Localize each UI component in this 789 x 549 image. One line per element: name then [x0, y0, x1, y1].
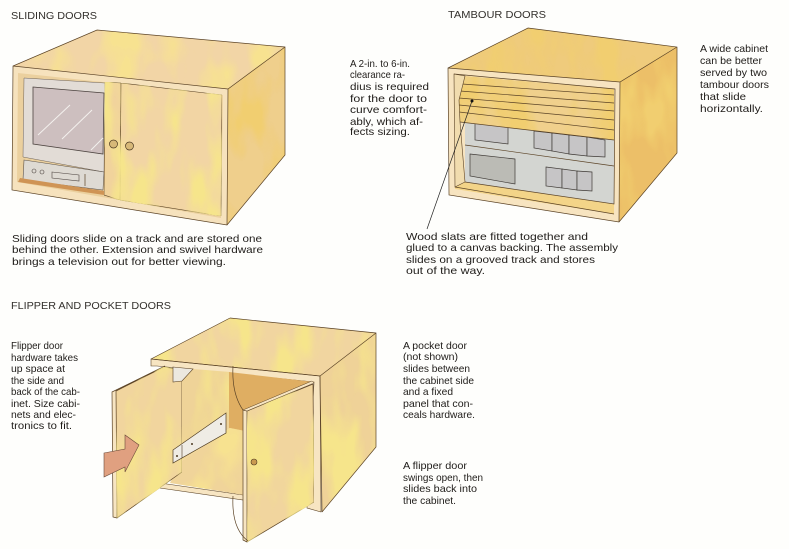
text: flipper hardware note: the side and — [11, 376, 64, 387]
text: pocket door note: A pocket door — [403, 341, 468, 352]
text: pocket door note: the cabinet side — [403, 376, 474, 387]
text: sliding doors caption: brings a television out for better viewing. — [12, 257, 226, 268]
track strip — [18, 178, 104, 195]
text: flipper hardware note: hardware takes — [11, 353, 78, 364]
text: flipper hardware note: Flipper door — [11, 341, 64, 352]
cabinet top face — [448, 28, 677, 82]
text: clearance radius note — [350, 59, 429, 138]
text: clearance radius note: dius is required — [350, 82, 429, 93]
text: flipper door note — [403, 461, 483, 507]
text: flipper door note: A flipper door — [403, 461, 468, 472]
interior left wall — [180, 368, 230, 462]
text: wood slats caption: slides on a grooved track and stores — [406, 255, 595, 266]
tambour slats — [459, 76, 614, 140]
cabinet bottom frame — [160, 483, 250, 501]
text: clearance radius note: curve comfort- — [350, 105, 427, 116]
text: clearance radius note: fects sizing. — [350, 127, 410, 138]
opening with television — [17, 73, 223, 218]
text: flipper door note: slides back into — [403, 484, 477, 495]
text: sliding doors caption: Sliding doors slide on a track and are stored one — [12, 234, 262, 245]
interior back panel — [229, 372, 314, 432]
door knobs — [110, 140, 134, 150]
inner bottom — [455, 181, 614, 214]
screen glare — [38, 105, 103, 150]
cabinet top face — [151, 318, 376, 376]
text: flipper hardware note: inet. Size cabi- — [11, 399, 80, 410]
right door — [243, 381, 314, 542]
arrow — [104, 435, 139, 477]
hinge plate — [173, 367, 193, 382]
illustration: tambour door cabinet — [427, 28, 677, 229]
text: pocket door note — [403, 341, 475, 421]
text: flipper hardware note: tronics to fit. — [11, 421, 72, 432]
text: pocket door note: ceals hardware. — [403, 410, 475, 421]
text: wide cabinet note — [700, 44, 769, 115]
cabinet front frame — [151, 359, 321, 512]
television screen — [33, 87, 104, 154]
text: wood slats caption: glued to a canvas backing. The assembly — [406, 243, 619, 254]
text: flipper door note: swings open, then — [403, 473, 483, 484]
cabinet top face — [13, 30, 285, 89]
illustration: flipper door cabinet — [104, 318, 376, 542]
right sliding door — [120, 83, 222, 216]
text: wood slats caption — [406, 232, 619, 277]
text: pocket door note: and a fixed — [403, 387, 453, 398]
illustration: sliding door cabinet — [12, 30, 285, 225]
text: flipper door note: the cabinet. — [403, 496, 456, 507]
text: wide cabinet note: that slide — [700, 92, 746, 103]
door swing arcs — [233, 366, 248, 541]
heading: sliding doors: SLIDING DOORS — [11, 10, 97, 22]
text: wood slats caption: out of the way. — [406, 266, 485, 277]
cabinet right side — [320, 333, 376, 512]
text: flipper hardware note: back of the cab- — [11, 387, 80, 398]
text: sliding doors caption: behind the other. Extension and swivel hardware — [12, 245, 263, 256]
text: wide cabinet note: can be better — [700, 56, 763, 67]
heading: tambour doors: TAMBOUR DOORS — [448, 9, 546, 21]
text: sliding doors caption — [12, 234, 263, 268]
flipper slide rail — [173, 413, 226, 463]
text: clearance radius note: ably, which af- — [350, 117, 423, 128]
text: wood slats caption: Wood slats are fitted together and — [406, 232, 588, 243]
interior floor — [170, 428, 250, 496]
text: pocket door note: slides between — [403, 364, 470, 375]
heading: flipper and pocket doors: FLIPPER AND POCKET DOORS — [11, 300, 171, 312]
text: flipper hardware note: up space at — [11, 364, 65, 375]
text: pocket door note: (not shown) — [403, 352, 458, 363]
cabinet right side — [619, 47, 677, 222]
text: flipper hardware note: nets and elec- — [11, 410, 76, 421]
side track strip — [454, 74, 465, 187]
text: clearance radius note: A 2-in. to 6-in. — [350, 59, 410, 70]
television body — [23, 78, 105, 172]
interior electronics — [465, 122, 614, 204]
text: wide cabinet note: A wide cabinet — [700, 44, 768, 55]
cabinet front frame — [12, 66, 228, 225]
text: wide cabinet note: served by two — [700, 68, 767, 79]
text: wide cabinet note: horizontally. — [700, 104, 763, 115]
text: clearance radius note: clearance ra- — [350, 70, 405, 81]
text: clearance radius note: for the door to — [350, 94, 427, 105]
cabinet front frame — [448, 68, 620, 222]
door knob — [251, 459, 257, 465]
leader line with dot — [427, 100, 474, 229]
left door — [112, 366, 182, 518]
video recorder — [23, 160, 104, 190]
text: flipper hardware note — [11, 341, 80, 432]
text: pocket door note: panel that con- — [403, 399, 473, 410]
text: wide cabinet note: tambour doors — [700, 80, 769, 91]
cabinet right side — [227, 47, 285, 225]
left sliding door — [104, 82, 121, 200]
